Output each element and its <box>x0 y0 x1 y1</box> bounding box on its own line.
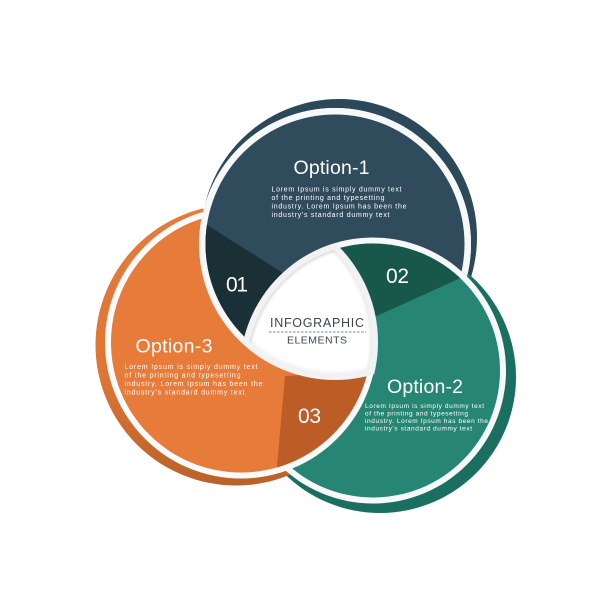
heading: option 1: Option-1 <box>294 157 370 179</box>
text block: option 2: industry's standard dummy text <box>365 426 472 433</box>
text block: option 2: of the printing and typesetting <box>365 411 468 418</box>
number 03: 03 <box>298 405 321 428</box>
heading: infographic elements: ELEMENTS <box>287 334 347 346</box>
heading: option 3: Option-3 <box>136 336 212 358</box>
heading: option 2: Option-2 <box>387 376 463 398</box>
panel: option 1 circle base <box>199 99 477 380</box>
text block: option 3: of the printing and typesetting <box>124 372 241 380</box>
text block: option 1: industry's standard dummy text <box>272 212 390 219</box>
number 02: 02 <box>386 265 409 288</box>
text block: option 3: industry. Lorem Ipsum has been the <box>124 381 263 388</box>
text block: option 1: Lorem Ipsum is simply dummy text <box>272 186 402 194</box>
panel: option 2 circle <box>286 238 506 504</box>
text block: option 1: industry. Lorem Ipsum has been the <box>272 204 407 210</box>
panel: center badge <box>242 243 378 380</box>
text block: option 3: industry's standard dummy text <box>124 390 245 396</box>
heading: infographic elements <box>269 316 366 346</box>
text block: option 2: industry. Lorem Ipsum has been the <box>365 418 488 425</box>
text block: option 3: Lorem Ipsum is simply dummy text <box>124 364 258 371</box>
heading: infographic elements: INFOGRAPHIC <box>270 316 364 330</box>
shadow: option 2 circle <box>244 241 516 513</box>
text block: option 2: Lorem Ipsum is simply dummy text <box>365 403 484 410</box>
text block: option 1 <box>272 186 407 219</box>
text block: option 2 <box>365 403 488 433</box>
panel: option 1 overlap with dark wedge <box>199 108 471 344</box>
panel: option 3 circle <box>105 212 374 478</box>
text block: option 3 <box>124 364 263 396</box>
number 01: 01 <box>226 274 248 296</box>
text block: option 1: of the printing and typesetting <box>272 195 385 202</box>
shadow: option 3 circle <box>96 204 376 486</box>
